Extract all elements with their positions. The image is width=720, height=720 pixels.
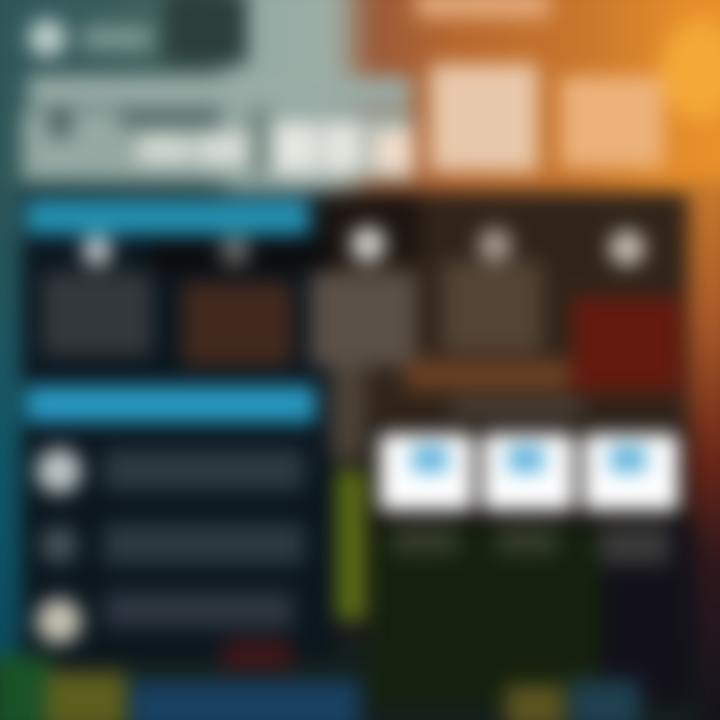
card one: icon <box>412 446 448 472</box>
title letter highlight five <box>372 128 414 174</box>
section header: first cyan bar <box>26 199 310 235</box>
footer: red accent <box>222 640 292 670</box>
column two: text <box>182 282 292 366</box>
header photo highlight right <box>560 76 664 168</box>
panel: right dark top shading <box>320 192 420 262</box>
card one caption <box>392 526 458 554</box>
title letter highlight three <box>272 122 318 174</box>
top right glow <box>660 20 720 120</box>
column one: text <box>42 272 152 356</box>
title line two backing <box>22 110 414 180</box>
background: right edge <box>688 180 720 720</box>
title letter gap one <box>48 110 72 138</box>
header logo text <box>82 26 152 50</box>
list item one: text <box>104 450 304 490</box>
list item three: icon <box>36 598 82 644</box>
header dark block <box>165 0 247 64</box>
title line one <box>28 76 412 106</box>
card one <box>379 433 473 511</box>
list item three: text <box>104 592 294 628</box>
column four: icon <box>478 228 512 262</box>
footer: yellow left <box>46 672 126 720</box>
footer: blue right <box>570 680 640 720</box>
header photo highlight left <box>430 64 538 172</box>
lower right green field <box>370 525 610 705</box>
column three: text <box>310 272 416 366</box>
panel: lower right <box>370 425 690 530</box>
column three: icon <box>350 226 386 262</box>
title block <box>8 62 430 194</box>
caption above cards <box>452 400 582 416</box>
footer: yellow right <box>505 685 565 720</box>
column five: icon <box>609 230 645 266</box>
card three: icon <box>610 446 646 472</box>
card two: icon <box>508 446 544 472</box>
card two <box>482 433 574 511</box>
column four: text <box>442 262 542 352</box>
footer: blue <box>130 680 360 720</box>
lower right dark field <box>600 525 695 705</box>
column two: icon <box>220 236 250 266</box>
footer: green left <box>0 655 50 720</box>
title letter gap three <box>250 108 270 174</box>
background: lower area <box>20 640 700 720</box>
card three <box>583 433 679 511</box>
column five: text <box>572 296 682 392</box>
background: header band <box>0 0 720 195</box>
section header: second cyan bar <box>26 385 316 423</box>
panel: left dark <box>22 192 334 660</box>
list item one: icon <box>36 448 82 494</box>
orange band under columns <box>405 360 570 390</box>
background: left edge <box>0 190 22 670</box>
header top highlight <box>416 0 550 18</box>
list item two: text <box>104 524 304 564</box>
title letter highlight two <box>198 132 258 166</box>
title letter gap two <box>120 108 220 130</box>
list item two: icon <box>40 526 78 564</box>
header logo icon <box>28 19 66 57</box>
title letter highlight one <box>138 134 192 164</box>
column one: icon <box>82 236 112 266</box>
title letter highlight four <box>322 122 362 174</box>
card three caption <box>600 526 670 564</box>
card two caption <box>496 526 558 554</box>
band of black across column tops <box>150 238 330 272</box>
central vertical strip upper <box>330 360 366 460</box>
panel: right dark <box>330 192 688 435</box>
central vertical strip green <box>336 470 366 620</box>
